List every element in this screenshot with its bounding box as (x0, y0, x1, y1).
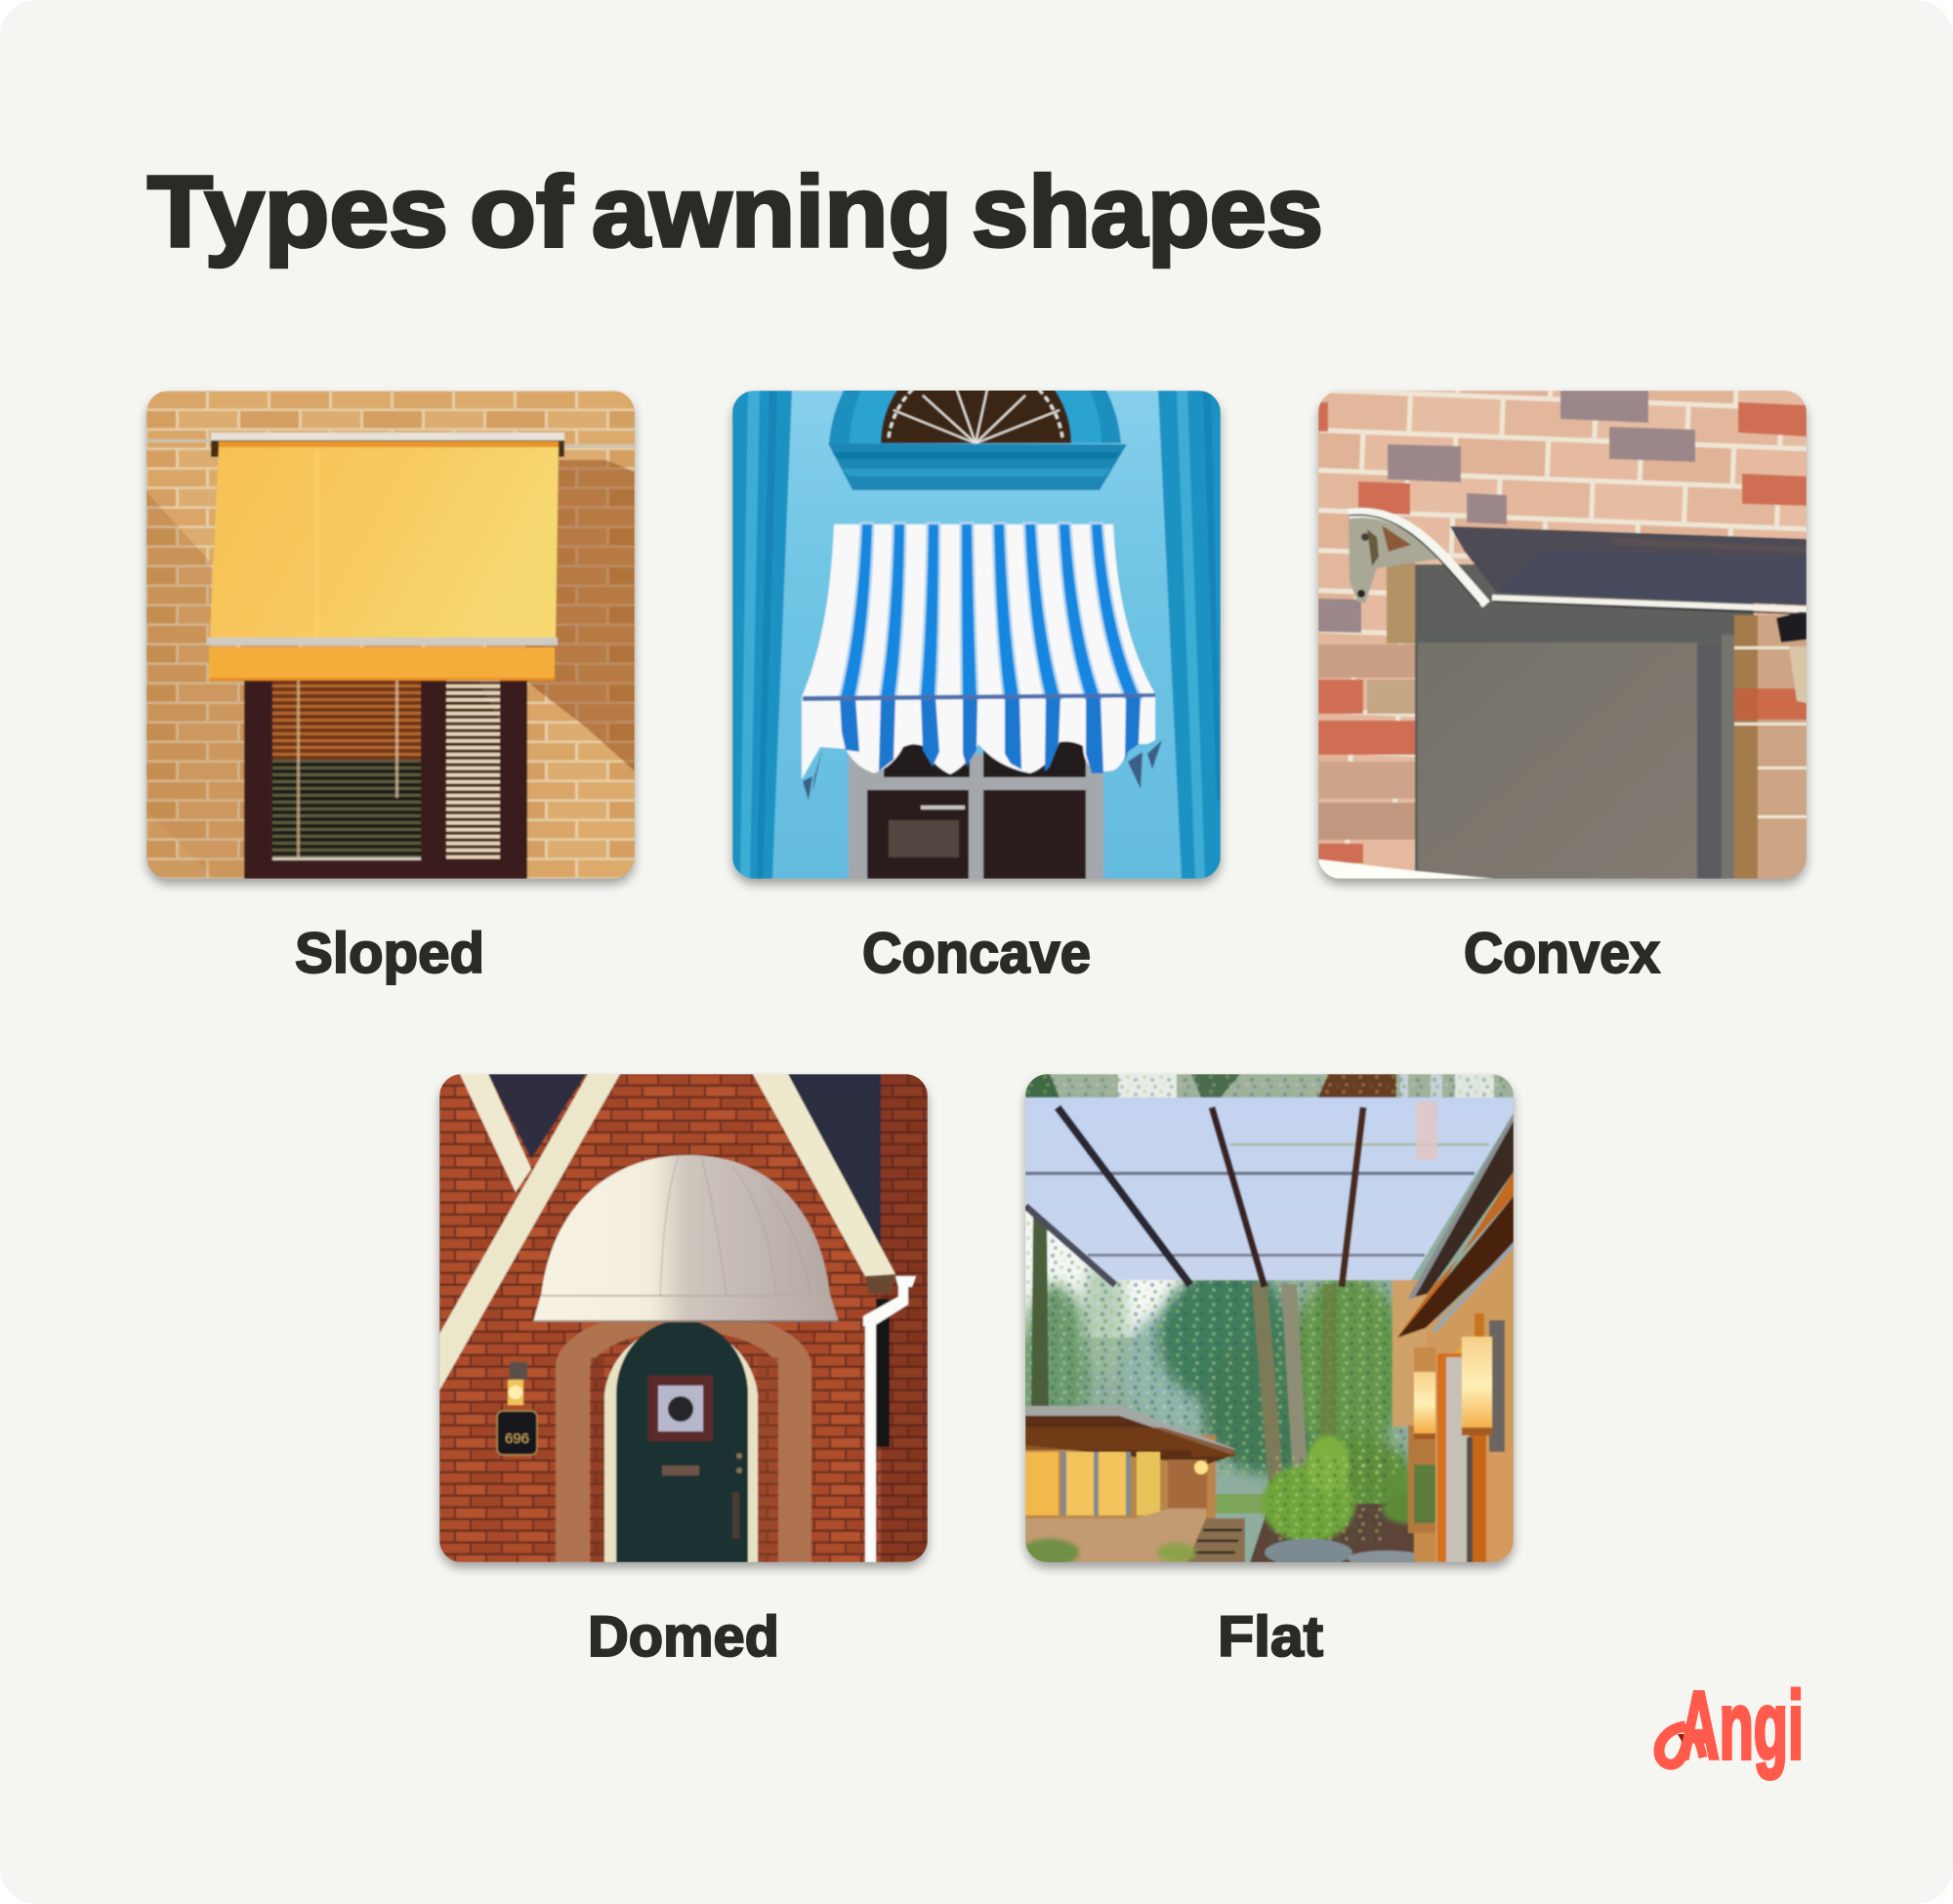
dome canopy (533, 1155, 839, 1322)
lamp (508, 1362, 527, 1405)
downspout (863, 1276, 916, 1562)
logo: Angi: Angi (1679, 1672, 1804, 1779)
bracket (1349, 517, 1440, 603)
label: Concave: Concave (862, 922, 1091, 985)
panel: concave awning (727, 391, 1226, 974)
photo: concave striped awning on blue facade (732, 391, 1221, 879)
door (604, 1320, 758, 1562)
label: Convex: Convex (1464, 922, 1660, 985)
photo: sloped yellow awning on brick wall (146, 391, 635, 879)
title: of (470, 155, 573, 268)
title (147, 155, 1323, 268)
background cabin (1020, 1406, 1245, 1566)
panel: sloped awning (146, 391, 635, 985)
logo: Angi (1659, 1672, 1804, 1779)
photo shadow (1318, 396, 1807, 885)
fanlight (880, 391, 1072, 445)
house number plaque: 696 (505, 1430, 529, 1447)
label: Sloped: Sloped (295, 922, 484, 985)
brick door arch (556, 1308, 811, 1562)
photo shadow (732, 396, 1221, 885)
forest garden (1250, 1433, 1417, 1562)
photo shadow (1025, 1080, 1514, 1568)
photo: domed awning over arched door (439, 1074, 928, 1562)
right-hand building (1392, 1113, 1514, 1562)
panel: domed awning (439, 1074, 928, 1669)
doorway (1415, 564, 1754, 879)
treetops above canopy (1025, 1074, 1514, 1097)
photo shadow (146, 396, 635, 885)
title: Types (147, 155, 448, 268)
photo: convex canopy over doorway (1318, 391, 1807, 879)
striped fabric (802, 524, 1155, 779)
house number plaque (497, 1411, 537, 1455)
label: Domed: Domed (588, 1605, 779, 1669)
window (849, 737, 1103, 879)
wall lamps (1414, 1313, 1505, 1452)
canopy panel (1450, 526, 1807, 605)
title: awning (592, 155, 952, 268)
panel: flat awning (1020, 1074, 1514, 1669)
label: Flat: Flat (1218, 1605, 1323, 1669)
photo: flat translucent canopy over forest courtyard (1020, 1074, 1514, 1566)
panel: convex awning (1318, 391, 1807, 985)
title: shapes (972, 155, 1323, 268)
canopy (1025, 1097, 1514, 1280)
photo shadow (439, 1080, 928, 1568)
